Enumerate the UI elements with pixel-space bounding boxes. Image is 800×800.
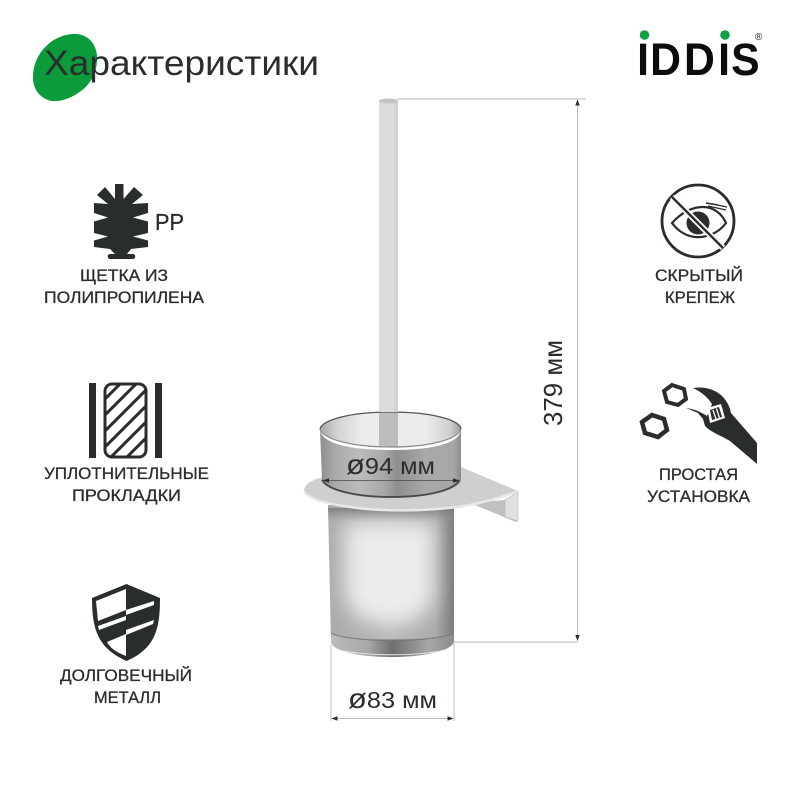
title: Характеристики xyxy=(44,44,319,83)
icon: nuts and wrench xyxy=(642,385,757,464)
label: metal: МЕТАЛЛ xyxy=(94,688,161,707)
feature: durable metal xyxy=(60,584,192,707)
diameter 83 label: ø83 мм xyxy=(348,683,437,714)
label: metal: ДОЛГОВЕЧНЫЙ xyxy=(60,666,192,685)
brush rod xyxy=(379,98,398,412)
label: brush: ПОЛИПРОПИЛЕНА xyxy=(44,288,205,307)
shelf plate xyxy=(304,467,518,511)
dimension: height 379 mm xyxy=(397,99,586,642)
dimension: diameter 94 mm xyxy=(323,449,459,483)
icon: crossed eye xyxy=(662,185,734,257)
diameter 94 label: ø94 мм xyxy=(346,449,435,480)
wall bracket xyxy=(470,492,518,522)
logo dots xyxy=(640,30,730,40)
label: hidden mount: КРЕПЕЖ xyxy=(665,288,735,307)
feature: easy install xyxy=(642,385,757,506)
registered mark: ® xyxy=(755,32,763,43)
logo wordmark: IDDIS xyxy=(637,35,760,85)
icon: shield xyxy=(92,584,160,661)
label: easy install: ПРОСТАЯ xyxy=(659,465,738,484)
label: hidden mount: СКРЫТЫЙ xyxy=(655,266,743,285)
dimension: diameter 83 mm xyxy=(331,642,454,721)
feature: gaskets xyxy=(44,370,209,505)
icon: brush head xyxy=(94,184,148,259)
height label: 379 мм xyxy=(538,340,568,426)
label: gaskets: ПРОКЛАДКИ xyxy=(72,486,181,505)
icon: gasket section xyxy=(89,382,162,458)
label: gaskets: УПЛОТНИТЕЛЬНЫЕ xyxy=(44,464,209,483)
logo: IDDIS xyxy=(637,30,763,85)
feature: hidden mount xyxy=(655,185,743,307)
upper glass cup xyxy=(320,412,461,497)
icon label: PP: PP xyxy=(155,209,184,235)
title blob xyxy=(33,34,97,101)
lower frosted glass xyxy=(328,505,454,660)
label: brush: ЩЕТКА ИЗ xyxy=(80,266,168,285)
feature: polypropylene brush xyxy=(44,184,205,307)
product: toilet brush holder xyxy=(304,98,518,660)
label: easy install: УСТАНОВКА xyxy=(647,487,751,506)
